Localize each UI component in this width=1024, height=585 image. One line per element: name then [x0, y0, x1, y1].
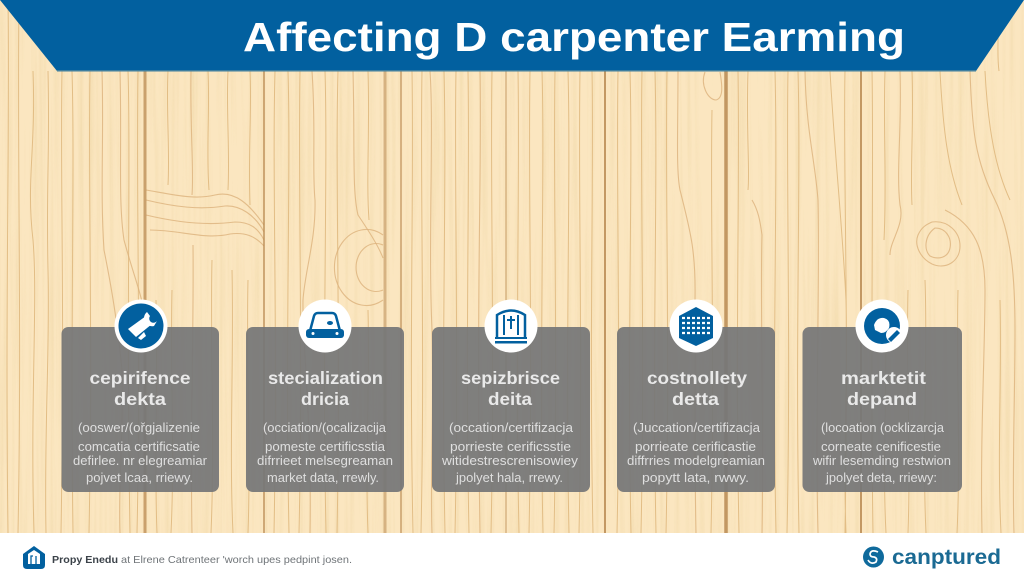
icon: wrench [114, 300, 168, 352]
panel body text: porrieste cerificsstie [450, 440, 571, 454]
panel body text [812, 421, 951, 485]
panel heading: costnollety [647, 368, 747, 388]
panel body text [73, 421, 207, 485]
panel: experience [62, 300, 219, 492]
panel body text: wifir lesemding restwion [812, 454, 951, 468]
footer note [23, 546, 352, 569]
panel body text: popytt lata, rwwy. [642, 471, 749, 485]
footer text: Propy Enedu [52, 554, 118, 566]
panel: specialization [246, 300, 404, 492]
panel body text [257, 421, 393, 485]
icon: house logo [23, 546, 45, 569]
panel body text [441, 421, 579, 485]
panel heading: marktetit [841, 368, 926, 388]
panel body text: corneate cenificestie [821, 440, 941, 454]
panel body text: diffrries modelgreamian [627, 454, 765, 468]
panel body text: market data, rrewly. [267, 471, 379, 485]
panel heading: cepirifence [90, 368, 191, 388]
icon: swirl [863, 546, 884, 568]
panel body text: (ooswer/(ořgjalizenie [78, 421, 200, 435]
panel heading [268, 368, 383, 409]
panel body text: jpolyet deta, rriewy: [825, 471, 937, 485]
panel body text: witidestrescrenisowiey [441, 454, 579, 468]
panel: enterprise [432, 300, 590, 492]
brand logo [863, 546, 1001, 569]
title: Affecting D carpenter Earming [243, 14, 905, 60]
panel heading [647, 368, 747, 409]
panel heading [90, 368, 191, 409]
panel body text: pomeste certificsstia [265, 440, 385, 454]
panel heading [461, 368, 560, 409]
title banner [0, 0, 1024, 72]
panel heading: sepizbrisce [461, 368, 560, 388]
panel: continuity [617, 300, 775, 492]
icon: person with pencil [856, 300, 908, 352]
panel body text: difrrieet melsegreaman [257, 454, 393, 468]
panel body text: (occation/certifizacja [449, 421, 573, 435]
panel: market demand [802, 300, 962, 492]
footer band [0, 533, 1024, 585]
panel body text: comcatia certificsatie [78, 440, 200, 454]
footer text: at Elrene Catrenteer 'worch upes pedpint josen. [121, 554, 352, 566]
panel body text: (Juccation/certifizacja [633, 421, 760, 435]
panel body text: jpolyet hala, rrewy. [455, 471, 563, 485]
panel heading: deita [488, 389, 532, 409]
panel heading: dricia [301, 389, 349, 409]
panel heading: depand [847, 389, 917, 409]
icon: institution [484, 300, 538, 352]
panel heading: detta [672, 389, 719, 409]
panel body text: (occiation/(ocalizacija [263, 421, 386, 435]
panel body text: pojvet lcaa, rriewy. [86, 471, 193, 485]
panel body text: (locoation (ocklizarcja [821, 421, 944, 435]
panel body text: porrieate cerificastie [635, 440, 756, 454]
panel body text [627, 421, 765, 485]
panel heading [841, 368, 926, 409]
panel heading: dekta [114, 389, 166, 409]
brand name: canptured [892, 546, 1001, 569]
panel body text: defirlee. nr elegreamiar [73, 454, 207, 468]
icon: vehicle [298, 300, 352, 352]
icon: building [670, 300, 722, 352]
panel heading: stecialization [268, 368, 383, 388]
